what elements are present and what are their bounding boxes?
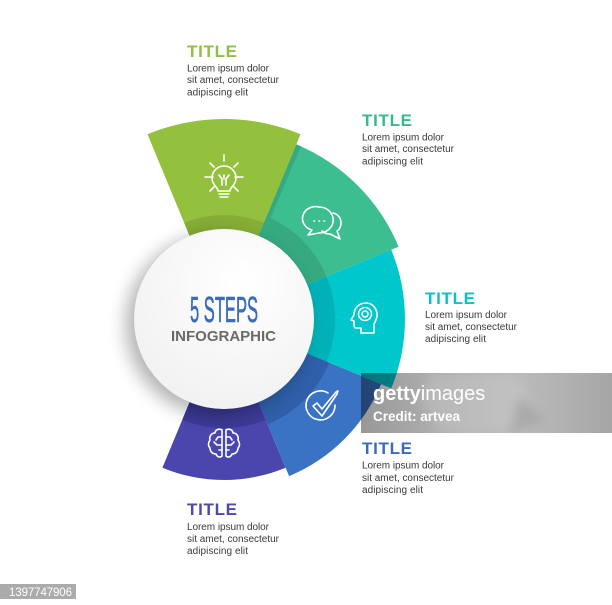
icon: chat bubbles: [302, 207, 341, 239]
image id tag: [0, 584, 76, 599]
label: step 5 text: Lorem ipsum dolor: [187, 522, 270, 533]
label: step 1 text: [187, 42, 280, 98]
icon: head with gear: [351, 303, 377, 333]
label: step 5 text: [187, 500, 280, 557]
label: step 1 text: TITLE: [187, 42, 237, 61]
segment: blue step 4: [258, 353, 381, 476]
icon: check mark: [306, 391, 338, 420]
icon: brain: [208, 429, 240, 457]
label: step 4 text: TITLE: [362, 439, 412, 458]
label: step 4 text: adipiscing elit: [362, 485, 423, 496]
center circle: [134, 229, 314, 409]
watermark banner: [361, 373, 612, 433]
segment: green step 1: [148, 119, 300, 236]
label: step 2 text: sit amet, consectetur: [362, 144, 455, 155]
segment: teal step 2: [258, 144, 399, 285]
label: step 5 text: adipiscing elit: [187, 546, 248, 557]
label: step 2 text: TITLE: [362, 111, 412, 130]
label: step 4 text: sit amet, consectetur: [362, 473, 455, 484]
watermark banner: Credit: artvea: [373, 409, 460, 424]
label: step 1 text: sit amet, consectetur: [187, 75, 280, 86]
label: step 3 text: adipiscing elit: [425, 334, 486, 345]
segment: purple step 5: [162, 402, 286, 480]
label: step 3 text: TITLE: [425, 289, 475, 308]
label: step 5 text: sit amet, consectetur: [187, 534, 280, 545]
label: step 2 text: adipiscing elit: [362, 156, 423, 168]
center heading: INFOGRAPHIC: [171, 328, 276, 345]
segment: cyan step 3: [307, 250, 405, 388]
label: step 3 text: Lorem ipsum dolor: [425, 310, 508, 321]
label: step 2 text: Lorem ipsum dolor: [362, 132, 445, 144]
label: step 1 text: Lorem ipsum dolor: [187, 64, 270, 74]
label: step 1 text: adipiscing elit: [187, 88, 248, 98]
label: step 4 text: [362, 439, 455, 496]
label: step 4 text: Lorem ipsum dolor: [362, 460, 445, 472]
label: step 2 text: [362, 111, 455, 168]
watermark banner: gettyimages: [373, 383, 485, 405]
label: step 3 text: [425, 289, 518, 345]
image id tag: 1397747906: [9, 587, 72, 599]
center heading: 5 STEPS: [190, 289, 258, 330]
center heading: [171, 289, 276, 345]
icon: light bulb: [205, 155, 243, 197]
center circle shadow: [126, 235, 306, 415]
label: step 5 text: TITLE: [187, 500, 237, 519]
label: step 3 text: sit amet, consectetur: [425, 322, 518, 333]
